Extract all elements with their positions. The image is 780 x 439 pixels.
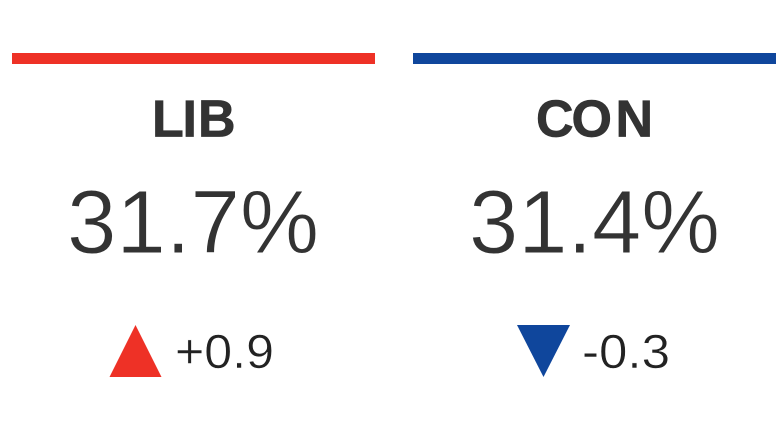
LIB heading: LIB [152, 90, 236, 148]
CON percentage: 31.4% [469, 173, 720, 273]
CON colour bar [413, 53, 776, 64]
LIB colour bar [12, 53, 375, 64]
LIB percentage: 31.7% [67, 173, 319, 273]
LIB change: +0.9 [175, 326, 274, 379]
panel: CON [413, 53, 776, 379]
panel: LIB [12, 53, 375, 379]
icon: red up triangle [110, 325, 162, 377]
CON change: -0.3 [582, 326, 670, 379]
icon: blue down triangle [517, 325, 570, 377]
CON heading: CON [536, 90, 653, 148]
